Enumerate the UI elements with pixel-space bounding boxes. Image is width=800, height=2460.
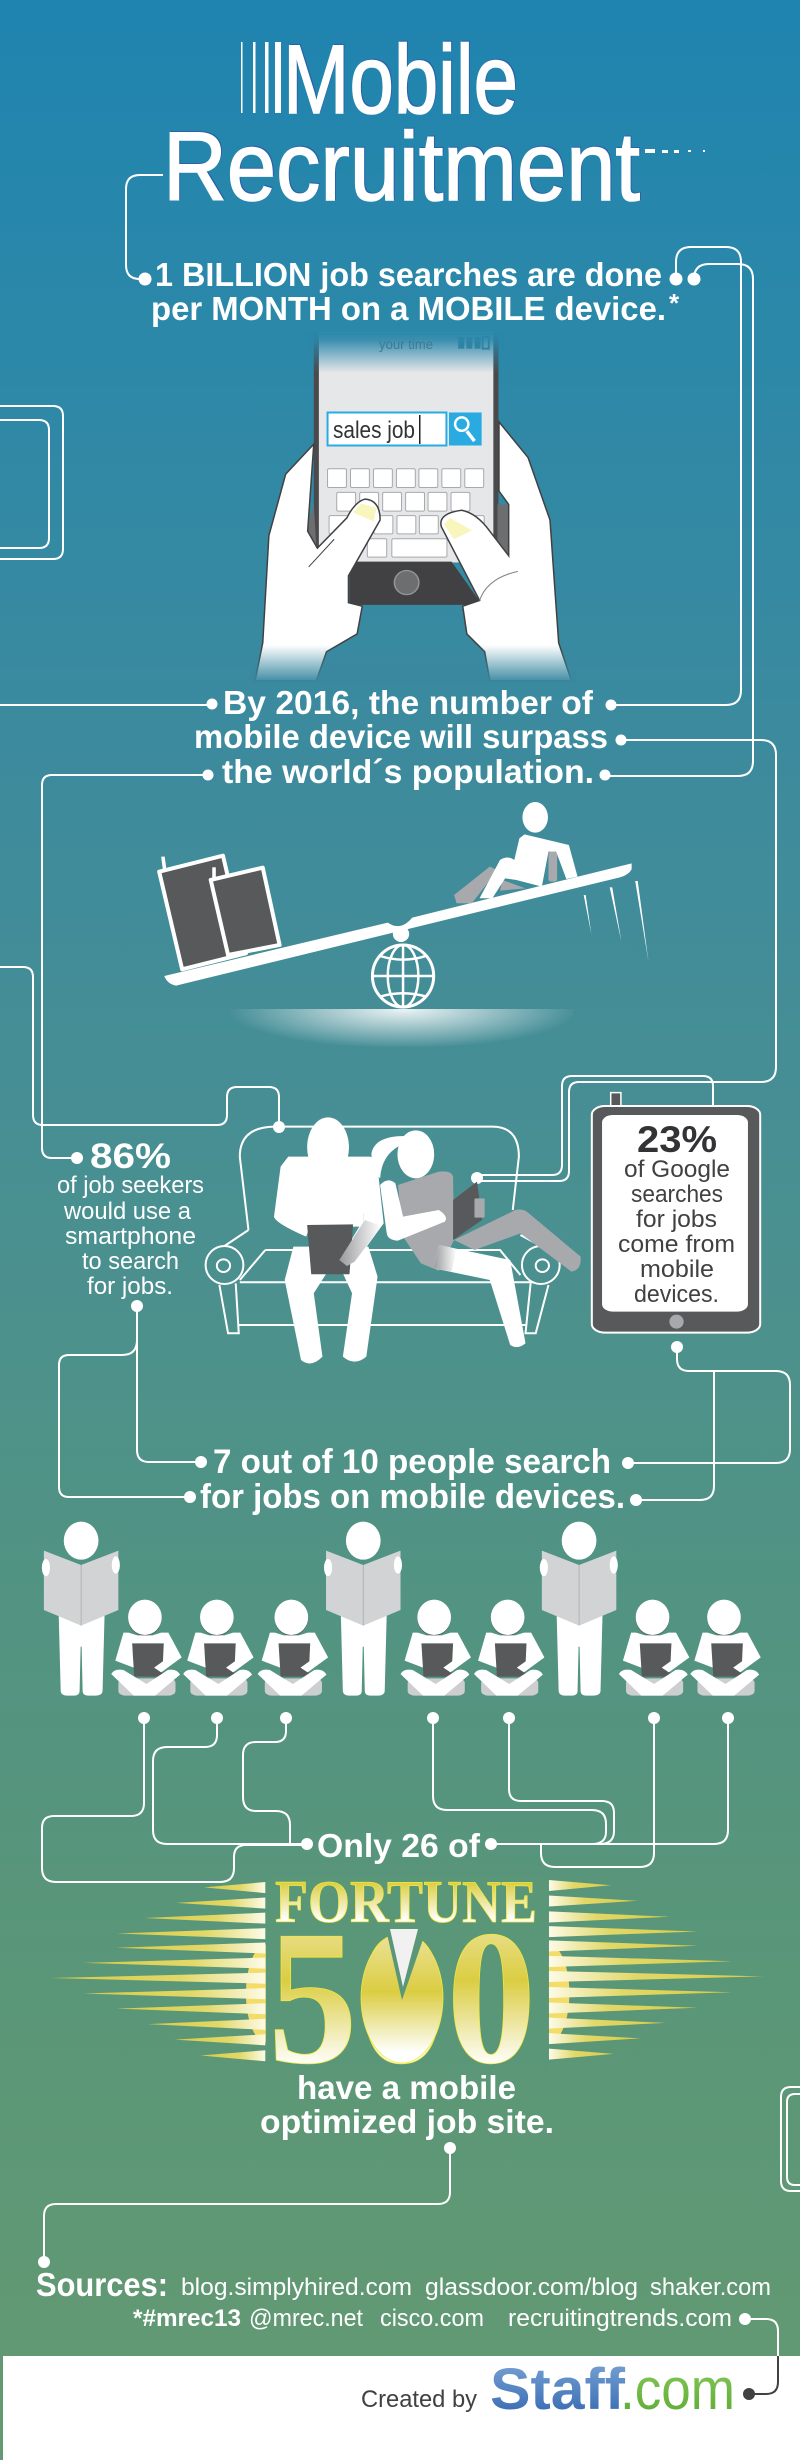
dot com logo: .com	[620, 2357, 735, 2422]
globe fulcrum	[372, 945, 434, 1007]
500 numerals: 500	[268, 1891, 536, 2104]
stat: 86 percent: smartphone	[65, 1223, 196, 1250]
motion lines	[584, 881, 648, 962]
sources: @mrec.net	[249, 2305, 363, 2332]
right hand crease	[480, 571, 518, 600]
illustration: ten people, three with newspapers and seven with tablets	[42, 1522, 761, 1696]
couch outline	[206, 1127, 560, 1333]
stat: 86 percent	[57, 1137, 204, 1300]
sources: glassdoor.com/blog	[425, 2274, 638, 2301]
stat: one billion searches: per MONTH on a MOBILE device.	[151, 290, 666, 327]
sources: Sources:	[36, 2266, 168, 2303]
stat: seven of ten: 7 out of 10 people search	[213, 1443, 611, 1481]
left hand	[255, 444, 380, 681]
stat: 86 percent: of job seekers	[57, 1172, 204, 1199]
title line 1: Mobile	[283, 25, 518, 134]
seesaw plank	[164, 863, 632, 986]
stat: 23 percent	[618, 1119, 735, 1308]
phone status text: your time	[379, 336, 433, 352]
staff logo: Staff	[490, 2357, 626, 2422]
created by: Created by	[361, 2386, 477, 2413]
phone screen	[319, 333, 493, 562]
stat: 23 percent: searches	[631, 1181, 723, 1208]
stat: mobile optimized	[260, 2069, 554, 2140]
illustration: couple on couch	[206, 1093, 760, 1363]
fortune 500 graphic	[51, 1869, 764, 2104]
title barcode stripes	[241, 42, 281, 113]
search query text: sales job	[333, 417, 415, 444]
footer band	[3, 2356, 800, 2460]
title	[163, 25, 705, 221]
right hand	[441, 422, 571, 681]
sources: blog.simplyhired.com	[181, 2274, 412, 2301]
stat: one billion searches	[151, 256, 680, 327]
stat: devices surpass population: mobile device will surpass	[194, 718, 608, 755]
stat: one billion searches: 1 BILLION job searches are done	[155, 256, 662, 293]
devices on seesaw	[159, 856, 280, 969]
tablet panel	[592, 1093, 760, 1333]
stat: 23 percent: come from	[618, 1231, 735, 1258]
man	[274, 1117, 384, 1363]
tablet readers	[111, 1600, 761, 1696]
connector dots	[38, 272, 755, 2400]
sources: cisco.com	[380, 2305, 484, 2332]
stat: devices surpass population	[194, 684, 608, 790]
newspaper readers	[42, 1522, 618, 1696]
person on seesaw	[454, 802, 578, 903]
stat: one billion searches: *	[669, 288, 680, 318]
bottom fade	[250, 645, 577, 683]
stat: 86 percent: 86%	[90, 1137, 171, 1176]
status bar icons	[458, 337, 489, 349]
keyboard	[328, 469, 484, 557]
search button	[449, 412, 482, 446]
stat: 23 percent: devices.	[634, 1281, 719, 1308]
sources	[36, 2266, 771, 2332]
solid zero with pie slice	[361, 1925, 443, 2063]
footer credit and logo	[361, 2357, 735, 2422]
heading: only 26 of: Only 26 of	[317, 1827, 481, 1864]
floor glow	[227, 1009, 574, 1047]
stat: 23 percent: mobile	[640, 1256, 714, 1283]
illustration: hands holding phone	[250, 333, 577, 683]
stat: 23 percent: for jobs	[636, 1206, 717, 1233]
stat: 86 percent: for jobs.	[87, 1273, 173, 1300]
stat: mobile optimized: have a mobile	[297, 2069, 516, 2106]
illustration: seesaw devices vs person	[159, 802, 648, 1047]
top fade	[306, 333, 505, 373]
phone body	[314, 333, 498, 562]
sources: *#mrec13	[133, 2305, 241, 2332]
sources: shaker.com	[650, 2274, 771, 2301]
stat: devices surpass population: By 2016, the number of	[223, 684, 594, 721]
phone home bar	[349, 562, 482, 605]
stat: seven of ten: for jobs on mobile devices.	[200, 1478, 625, 1516]
stat: 23 percent: 23%	[637, 1119, 717, 1160]
stat: mobile optimized: optimized job site.	[260, 2103, 554, 2140]
left hand crease	[309, 539, 334, 567]
thumbnails	[353, 504, 472, 539]
woman	[371, 1130, 581, 1347]
sunburst	[51, 1877, 764, 2069]
sources: recruitingtrends.com	[508, 2305, 732, 2332]
title line 2: Recruitment	[163, 112, 640, 221]
stat: 86 percent: to search	[82, 1248, 179, 1275]
fortune wordmark: FORTUNE	[275, 1869, 537, 1935]
stat: devices surpass population: the world´s population.	[222, 753, 594, 790]
title trailing dots	[645, 149, 705, 153]
stat: seven of ten	[200, 1443, 625, 1516]
pivot ball	[393, 926, 409, 942]
search field	[328, 412, 446, 446]
stat: 23 percent: of Google	[624, 1156, 730, 1183]
stat: 86 percent: would use a	[63, 1198, 192, 1225]
